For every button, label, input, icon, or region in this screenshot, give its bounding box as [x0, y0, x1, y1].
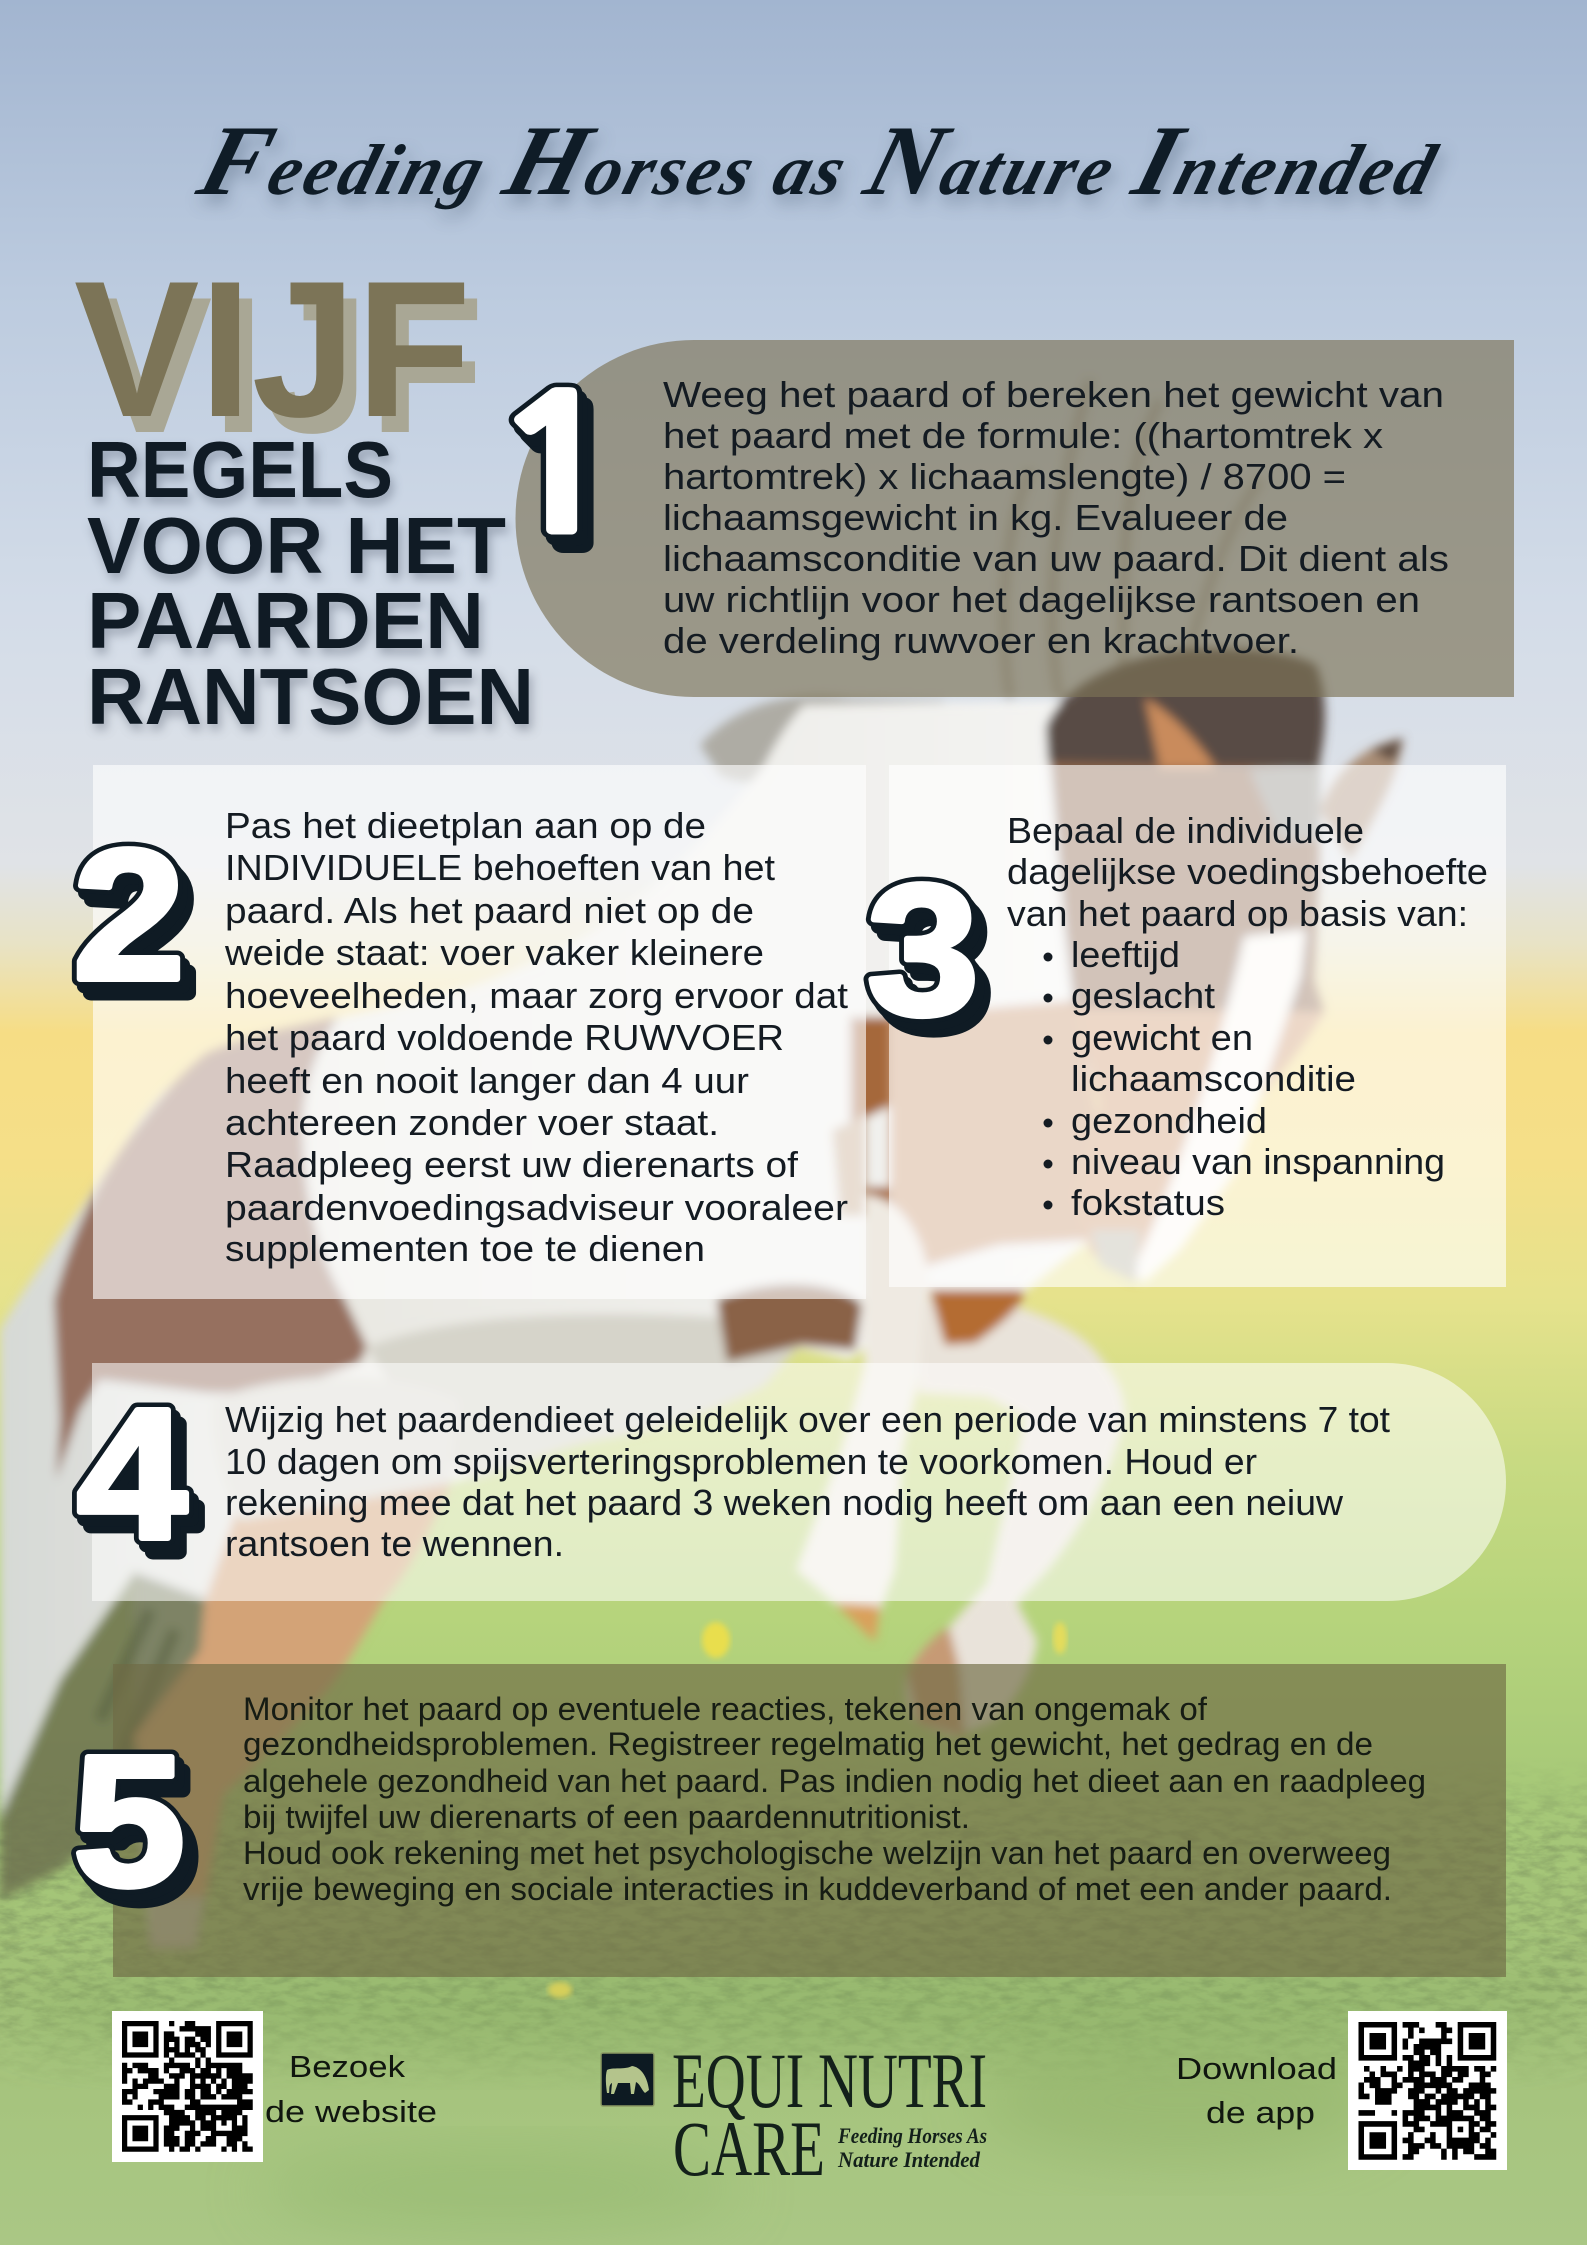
number 5: 5 — [73, 1718, 185, 1925]
belly shade — [367, 1314, 800, 1480]
number 4: 4 — [82, 1378, 192, 1585]
number 2: 2 — [78, 819, 190, 1026]
number 2: 2 — [73, 812, 185, 1019]
QR code: app — [1348, 2011, 1507, 2170]
brown chest strips — [850, 1017, 890, 1125]
panel 1 background — [516, 340, 1514, 697]
caption: visit website — [265, 2049, 437, 2129]
heading: regels voor het paarden rantsoen: REGELS — [87, 425, 393, 514]
number 4: 4 — [88, 1385, 198, 1592]
rule 5 text: algehele gezondheid van het paard. Pas indien nodig het dieet aan en raadpleeg — [243, 1763, 1426, 1799]
rule 4 text: Wijzig het paardendieet geleidelijk over een periode van minstens 7 tot — [225, 1399, 1390, 1440]
horse body base — [0, 700, 1100, 1945]
rule 3 bullet list: leeftijd — [1071, 934, 1180, 975]
caption: visit website: de website — [265, 2094, 437, 2129]
forelock — [1250, 765, 1320, 840]
number 3: 3 — [872, 854, 984, 1061]
number 1: 1 — [489, 374, 624, 559]
mane wisps behind panel 1 — [1004, 380, 1260, 700]
QR code: website — [112, 2011, 263, 2162]
icon: horse logo — [601, 2053, 654, 2106]
rule 2 text: hoeveelheden, maar zorg ervoor dat — [225, 975, 848, 1016]
logo wordmark: EQUI NUTRI — [672, 2037, 987, 2124]
number 3: 3 — [878, 861, 990, 1068]
rule 3 bullet list: gewicht en — [1071, 1017, 1253, 1058]
heading: regels voor het paarden rantsoen — [87, 425, 534, 741]
rule 5 text: vrije beweging en sociale interacties in kuddeverband of met een ander paard. — [243, 1871, 1392, 1907]
number 4: 4 — [77, 1371, 187, 1578]
rule 3 bullet list: fokstatus — [1071, 1182, 1225, 1223]
hind leg lower — [150, 1895, 205, 1950]
blaze — [1130, 930, 1305, 1282]
rule 5 text: Monitor het paard op eventuele reacties, tekenen van ongemak of — [243, 1691, 1207, 1727]
rule 1 text: Weeg het paard of bereken het gewicht van — [663, 374, 1444, 415]
front leg one — [796, 1195, 930, 1623]
rule 4 text: rantsoen te wennen. — [225, 1523, 564, 1564]
panel: rule 3 — [867, 765, 1506, 1287]
rule 2 text: Raadpleeg eerst uw dierenarts of — [225, 1144, 799, 1185]
heading: VIJF: VIJF — [87, 257, 484, 474]
front leg two — [906, 1298, 1125, 1737]
brown flank patch — [54, 1017, 367, 1480]
rule 1 text: lichaamsconditie van uw paard. Dit dient als — [663, 538, 1449, 579]
muzzle — [1091, 1230, 1140, 1282]
rule 2 text: achtereen zonder voer staat. — [225, 1102, 719, 1143]
panel 4 background — [92, 1363, 1506, 1601]
number 1: 1 — [489, 374, 624, 559]
number 2: 2 — [73, 812, 185, 1019]
rule 4 text: 10 dagen om spijsverteringsproblemen te voorkomen. Houd er — [225, 1441, 1257, 1482]
number 5: 5 — [78, 1725, 190, 1932]
rule 5 text — [243, 1691, 1426, 1907]
rule 2 text: supplementen toe te dienen — [225, 1228, 705, 1269]
panel: rule 4 — [77, 1363, 1506, 1601]
rule 4 text: rekening mee dat het paard 3 weken nodig heeft om aan een neiuw — [225, 1482, 1344, 1523]
number 1: 1 — [500, 388, 635, 573]
rule 3 bullet list: geslacht — [1071, 975, 1215, 1016]
heading: regels voor het paarden rantsoen: PAARDEN — [87, 576, 484, 665]
panel: rule 5 — [73, 1664, 1506, 1977]
panel: rule 1 — [489, 340, 1514, 697]
rule 2 text: INDIVIDUELE behoeften van het — [225, 847, 775, 888]
logo: Equi Nutri Care — [601, 2037, 987, 2192]
rule 3 bullet list: lichaamsconditie — [1071, 1058, 1356, 1099]
rule 1 text: de verdeling ruwvoer en krachtvoer. — [663, 620, 1299, 661]
script tagline title: Feeding Horses as Nature Intended — [187, 106, 1453, 217]
rule 4 text — [225, 1399, 1390, 1564]
rule 1 text: het paard met de formule: ((hartomtrek x — [663, 415, 1383, 456]
caption: download app: de app — [1206, 2095, 1315, 2130]
number 4: 4 — [77, 1371, 187, 1578]
dark mane top — [1046, 648, 1325, 768]
rule 3 bullet list: gezondheid — [1071, 1100, 1267, 1141]
panel: rule 2 — [73, 765, 866, 1299]
rule 3 intro text: dagelijkse voedingsbehoefte — [1007, 851, 1488, 892]
rule 1 text: lichaamsgewicht in kg. Evalueer de — [663, 497, 1288, 538]
rule 2 text: weide staat: voer vaker kleinere — [224, 932, 764, 973]
rule 2 text: Pas het dieetplan aan op de — [225, 805, 706, 846]
rule 5 text: bij twijfel uw dierenarts of een paardennutritionist. — [243, 1799, 970, 1835]
rule 2 text: heeft en nooit langer dan 4 uur — [225, 1060, 749, 1101]
rule 3 bullet list — [1044, 934, 1445, 1223]
number 1: 1 — [494, 381, 629, 566]
rule 1 text: uw richtlijn voor het dagelijkse rantsoen en — [663, 579, 1420, 620]
rule 3 bullet list: niveau van inspanning — [1071, 1141, 1445, 1182]
grey haunch arc — [213, 1378, 460, 1520]
heading: regels voor het paarden rantsoen: VOOR HET — [87, 501, 506, 590]
tail — [0, 1572, 205, 1900]
logo tagline: Feeding Horses As — [837, 2123, 987, 2148]
logo wordmark: CARE — [673, 2105, 825, 2192]
panel 3 background — [889, 765, 1506, 1287]
rule 3 intro text: van het paard op basis van: — [1007, 893, 1468, 934]
number 3: 3 — [867, 847, 979, 1054]
rule 5 text: Houd ook rekening met het psychologische welzijn van het paard en overweeg — [243, 1835, 1391, 1871]
rule 2 text — [224, 805, 848, 1269]
grey mane — [700, 695, 945, 782]
rule 1 text: hartomtrek) x lichaamslengte) / 8700 = — [663, 456, 1346, 497]
panel 2 background — [93, 765, 866, 1299]
rule 1 text — [663, 374, 1449, 661]
rule 5 text: gezondheidsproblemen. Registreer regelmatig het gewicht, het gedrag en de — [243, 1726, 1373, 1762]
head — [1048, 745, 1324, 1280]
logo tagline: Nature Intended — [837, 2147, 981, 2172]
ears — [1145, 698, 1216, 768]
neck tan — [890, 1000, 1105, 1295]
number 2: 2 — [84, 826, 196, 1033]
heading: regels voor het paarden rantsoen: RANTSOEN — [87, 652, 534, 741]
logo tagline — [837, 2123, 987, 2172]
rule 2 text: paardenvoedingsadviseur vooraleer — [225, 1187, 848, 1228]
logo wordmark — [672, 2037, 987, 2192]
number 5: 5 — [73, 1718, 185, 1925]
horse photo — [0, 380, 1403, 1950]
number 5: 5 — [84, 1732, 196, 1939]
rule 2 text: het paard voldoende RUWVOER — [225, 1017, 784, 1058]
caption: download app: Download — [1176, 2051, 1337, 2086]
heading: VIJF: VIJF — [74, 241, 471, 458]
dark belly patch — [717, 1284, 862, 1362]
number 3: 3 — [867, 847, 979, 1054]
caption: visit website: Bezoek — [289, 2049, 406, 2084]
orange hind leg — [134, 1483, 451, 1900]
chest brown patch — [930, 1290, 1023, 1345]
rule 3 intro text: Bepaal de individuele — [1007, 810, 1364, 851]
rule 3 intro text — [1007, 810, 1488, 934]
rule 2 text: paard. Als het paard niet op de — [225, 890, 754, 931]
caption: download app — [1176, 2051, 1337, 2130]
panel 5 background — [113, 1664, 1506, 1977]
